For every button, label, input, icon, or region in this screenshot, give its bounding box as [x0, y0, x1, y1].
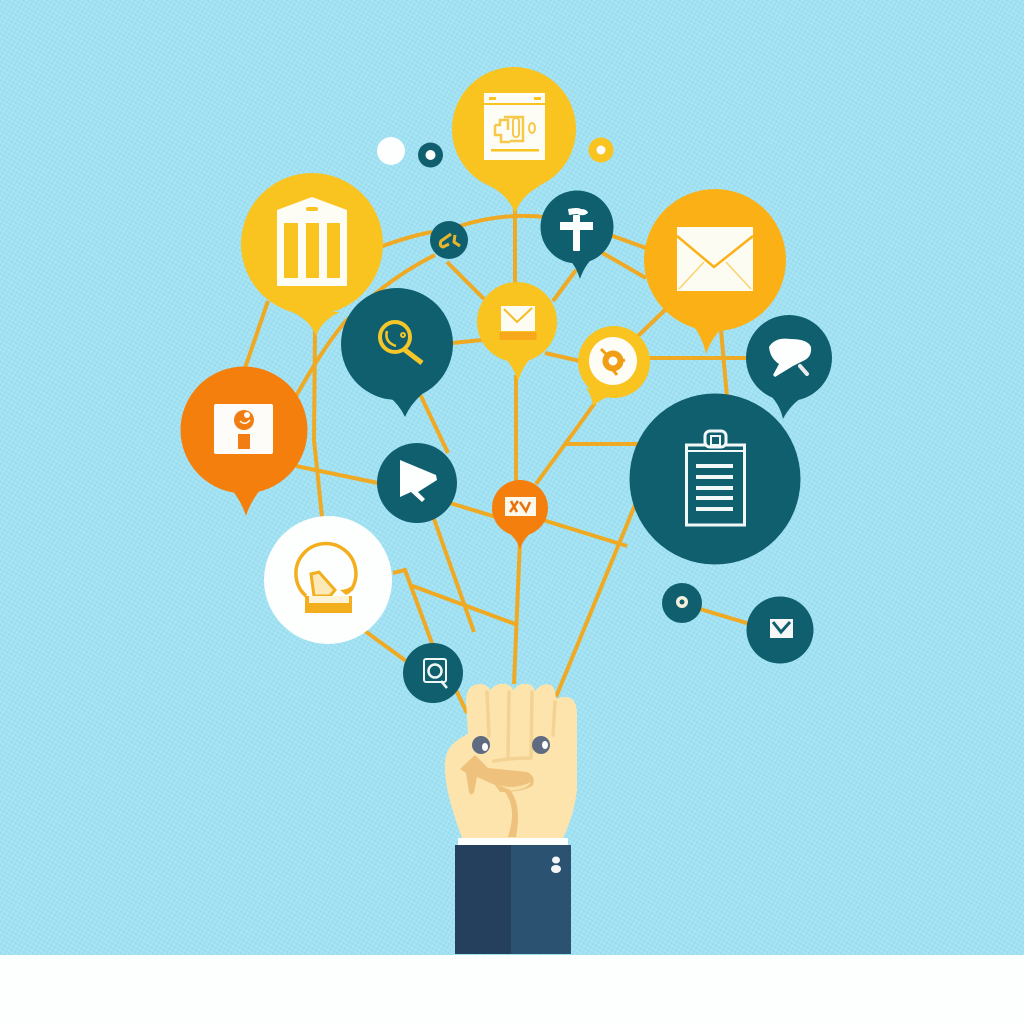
icon: magnifying glass — [380, 322, 422, 363]
icon: mail check — [770, 619, 793, 638]
knuckle dot right — [532, 736, 550, 754]
bubble: small teal mail — [746, 596, 814, 664]
bubble: small orange card — [492, 480, 548, 549]
bubble: yellow mail — [477, 282, 557, 381]
bubble: small teal search — [403, 643, 463, 703]
wrist crease — [496, 784, 518, 837]
icon: mail tray — [500, 306, 536, 340]
decorative dot: white — [377, 137, 405, 165]
fist — [445, 684, 577, 838]
bubble: teal pointer — [377, 443, 457, 523]
icon: columned building — [277, 197, 347, 286]
hand — [445, 684, 577, 838]
bubble: orange envelope — [644, 189, 786, 354]
sleeve buttons — [551, 856, 561, 873]
icon: small glyph — [440, 234, 460, 247]
bubble: left yellow building — [241, 173, 383, 336]
bubble: small teal dot node — [662, 583, 702, 623]
icon: browser window — [484, 93, 545, 160]
icon: small card — [505, 497, 536, 516]
icon: hammer cross — [560, 208, 593, 251]
connector lines — [245, 205, 750, 713]
floor band — [0, 955, 1024, 1024]
bubble: orange info card — [180, 366, 308, 516]
icon: speech bubble with handle — [769, 339, 811, 377]
decorative dot: teal ring — [418, 142, 443, 168]
bubble: teal cross — [540, 190, 614, 279]
finger creases — [487, 692, 555, 761]
bubble: small teal node — [430, 221, 468, 259]
icon: pointer arrow — [400, 460, 437, 502]
bubble: teal chat — [746, 315, 832, 419]
bubble: white scale — [264, 516, 392, 644]
decorative dot: yellow ring — [588, 138, 614, 162]
sleeve — [455, 845, 571, 954]
bubble: yellow target — [578, 326, 650, 406]
icon: target ring — [589, 337, 637, 385]
thumb shadow — [460, 755, 534, 794]
bubble: teal magnifier — [341, 288, 453, 417]
icon: envelope — [677, 227, 753, 291]
knuckle dot left — [472, 736, 490, 754]
icon: search square — [424, 659, 447, 688]
bubble: large teal clipboard — [630, 394, 800, 564]
icon: info card — [214, 404, 273, 454]
icon: dome on stand — [296, 544, 356, 613]
bubble: top yellow browser — [452, 67, 576, 213]
icon: clipboard — [686, 431, 745, 525]
shirt cuff — [458, 838, 568, 846]
